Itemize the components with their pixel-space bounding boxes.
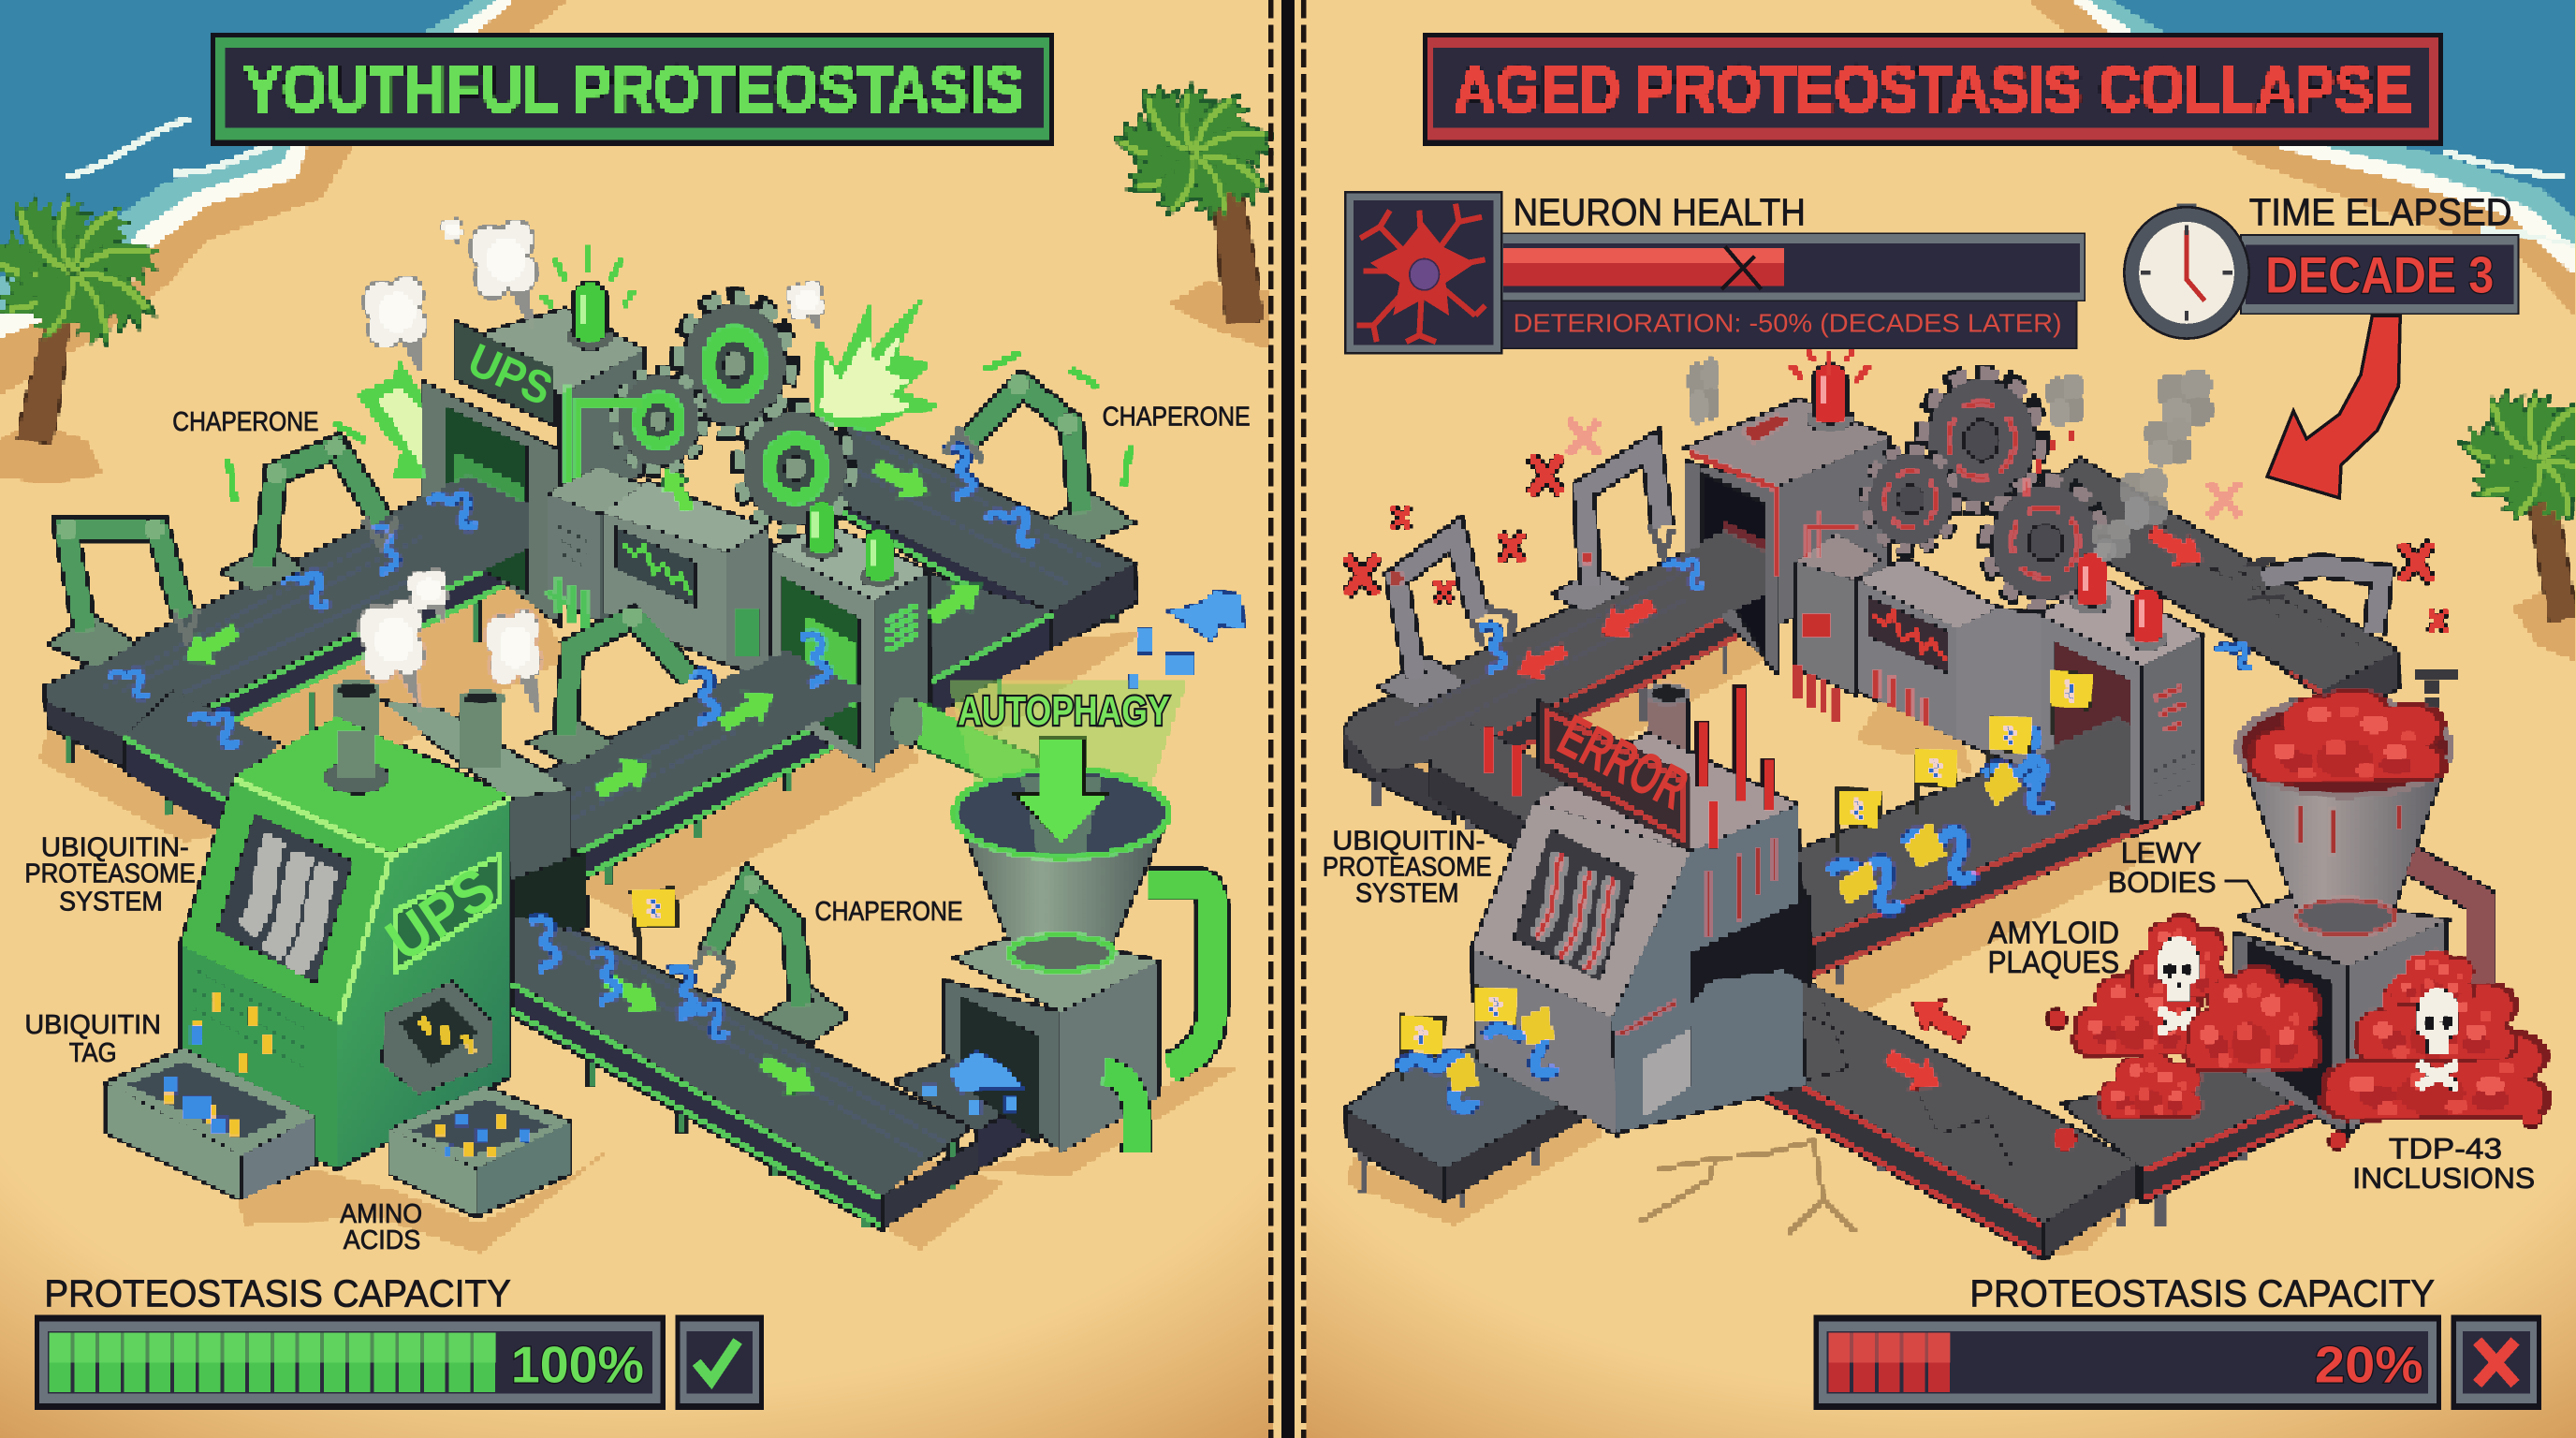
- shredder window: [217, 814, 353, 983]
- labels: left: [24, 403, 1251, 1255]
- green pipes to gears: [568, 387, 640, 493]
- labels: left: ACIDS: [344, 1225, 420, 1255]
- vents: [194, 970, 305, 1068]
- conveyor: lower right: [2063, 1040, 2315, 1225]
- blood streaks: [1618, 838, 1775, 1035]
- machine: cabinet aged: [1795, 513, 1881, 720]
- blue protein fragments: [1131, 592, 1244, 687]
- conveyor: right stub: [931, 575, 1051, 716]
- time elapsed panel: [2124, 190, 2519, 339]
- chimney: aged: [1647, 683, 1687, 770]
- labels: right: INCLUSIONS: [2352, 1161, 2535, 1195]
- time elapsed panel: DECADE 3: [2265, 246, 2494, 303]
- smoke: left: [359, 219, 824, 712]
- ocean: right: [2030, 0, 2576, 315]
- loose red inclusions: [2048, 1010, 2540, 1151]
- icon: x: [2452, 1314, 2541, 1410]
- pipe: to autophagy funnel: [890, 697, 1038, 796]
- capacity gauge: aged: PROTEOSTASIS CAPACITY: [1969, 1272, 2435, 1315]
- down arrow: [1014, 740, 1109, 844]
- gears: left: [614, 298, 852, 531]
- robot arm: upper right: [946, 374, 1134, 542]
- robot arm: lower: [694, 875, 848, 1042]
- aged factory art: [1344, 348, 2552, 1259]
- tagged proteins on belt: [1481, 561, 2250, 909]
- proteins on belts: left: [110, 448, 1033, 1036]
- arrow: time to decay: [2267, 315, 2400, 498]
- flag: tagged protein: [629, 884, 684, 959]
- machine: failing gate: [1686, 348, 1889, 674]
- conveyor: back left: [44, 500, 518, 814]
- panel: aged factory: [1323, 348, 2552, 1259]
- x marks: [1347, 420, 2446, 631]
- ground shadows: [1347, 624, 2152, 1257]
- labels: left: AMINO: [340, 1199, 422, 1229]
- bin: amino acids: [389, 1086, 570, 1216]
- bin: ubiquitin tag: [107, 991, 315, 1199]
- pile: small red: [2098, 1051, 2203, 1120]
- icon: clock: [2124, 204, 2249, 339]
- icon: green lamp: [542, 246, 634, 350]
- UPS sign plate: [455, 322, 553, 424]
- health bar: [1499, 233, 2085, 301]
- time elapsed panel: TIME ELAPSED: [2249, 190, 2512, 233]
- pipe: loop: [1150, 884, 1212, 1068]
- pile: lewy bodies: [2183, 964, 2322, 1072]
- conveyor: middle: [529, 641, 879, 884]
- machine: control cabinet: [547, 467, 649, 628]
- sand vignette right: [1306, 1051, 2576, 1438]
- title: youthful proteostasis: YOUTHFUL PROTEOSTASIS: [243, 51, 1023, 125]
- conveyor: back left stub: [1429, 723, 1586, 863]
- neuron health panel: NEURON HEALTH: [1513, 190, 1806, 233]
- ground cracks: [1641, 1140, 1855, 1233]
- labels: left: CHAPERONE: [172, 407, 318, 437]
- machine: exit gate: [723, 503, 929, 772]
- small energy marks: [228, 353, 1131, 501]
- icon: skull: [2159, 937, 2199, 1032]
- capacity gauge: aged: 20%: [2315, 1336, 2423, 1393]
- machine: autophagy funnel: [923, 740, 1212, 1153]
- labels: right: BODIES: [2108, 865, 2217, 899]
- labels: right: UBIQUITIN-: [1332, 827, 1486, 857]
- deterioration readout: DETERIORATION: -50% (DECADES LATER): [1513, 309, 2062, 338]
- conveyor: top right: [2021, 459, 2398, 731]
- labels: left: TAG: [69, 1038, 117, 1068]
- autophagy label: AUTOPHAGY: [958, 688, 1170, 734]
- belt arrows: left: [176, 450, 990, 1107]
- bar segments: [50, 1333, 496, 1392]
- pile: TDP-43 inclusions: [2319, 949, 2552, 1122]
- labels: right: LEWY: [2121, 836, 2202, 870]
- chimneys: [333, 681, 502, 781]
- youthful factory art: [39, 219, 1244, 1253]
- dark smoke: [1688, 359, 2213, 560]
- machine: monitor aged: [1858, 559, 2041, 772]
- blue debris in grinder: [923, 1051, 1022, 1114]
- labels: left: CHAPERONE: [1103, 403, 1251, 433]
- belt inside exit gate: [1996, 718, 2130, 853]
- pile: amyloid plaques: [2071, 914, 2226, 1057]
- palm tree: left: [0, 180, 170, 483]
- capacity gauge: youthful: 100%: [511, 1336, 644, 1393]
- bar segments: [1828, 1333, 1950, 1392]
- robot arm: aged upper: [1553, 447, 1673, 611]
- elbow pipe: [1104, 1072, 1137, 1151]
- labels: right: SYSTEM: [1355, 879, 1459, 909]
- flagged proteins at shredder exit: [1399, 986, 1554, 1108]
- machine: clogged funnel: [2234, 688, 2481, 1134]
- capacity gauge: youthful: [35, 1272, 764, 1410]
- robot arm: aged left: [1380, 535, 1515, 707]
- palm tree: right: [2457, 378, 2576, 661]
- panel: youthful factory: [24, 219, 1251, 1255]
- machine: monitor: [603, 481, 772, 677]
- error sign plate: [1538, 698, 1690, 851]
- labels: right: AMYLOID: [1988, 917, 2119, 951]
- ground shadows: [39, 575, 1236, 1253]
- conveyor: top right: [772, 422, 1137, 666]
- center divider: [1271, 0, 1304, 1438]
- title: aged proteostasis collapse: AGED PROTEOSTASIS COLLAPSE: [1454, 51, 2411, 125]
- belt inside gate: [419, 475, 527, 598]
- machine: error shredder: [1472, 733, 1808, 1134]
- exit arch: [1690, 897, 1808, 1005]
- labels: left: SYSTEM: [59, 888, 163, 917]
- red warning marks: [1484, 687, 1773, 850]
- robot arm: middle: [529, 607, 690, 766]
- burst: right of gears: [813, 296, 942, 431]
- labels: right: PROTEASOME: [1323, 853, 1492, 883]
- machine: UPS gate: [419, 246, 644, 624]
- machine: back box behind shredder: [378, 698, 587, 970]
- ocean: left: [0, 0, 567, 394]
- palm tree: center-left: [1111, 71, 1281, 348]
- machine: UPS shredder: [181, 681, 509, 1168]
- conveyor: lower cracked: [1708, 966, 2137, 1259]
- debris: [2415, 670, 2456, 707]
- ERROR text on sign: ERROR: [1548, 703, 1698, 822]
- labels: left: CHAPERONE: [815, 897, 962, 927]
- shredder window aged: [1513, 829, 1636, 981]
- machine: exit gate aged: [1996, 553, 2202, 853]
- labels: right: [1323, 827, 2535, 1195]
- sand vignette left: [0, 1051, 1273, 1438]
- neuron health panel: [1345, 190, 2085, 353]
- title: aged proteostasis collapse: [1423, 35, 2441, 144]
- labels: right: PLAQUES: [1988, 946, 2119, 980]
- neuron icon: [1345, 192, 1501, 353]
- capacity gauge: youthful: PROTEOSTASIS CAPACITY: [44, 1272, 511, 1315]
- conveyor: grinder feed: [896, 1049, 1038, 1170]
- gears: right: [1865, 373, 2104, 605]
- title: youthful proteostasis: [212, 35, 1055, 144]
- UPS sign plate on shredder: [394, 855, 501, 973]
- labels: left: UBIQUITIN-: [41, 833, 189, 863]
- robot arm: upper left: [222, 437, 398, 592]
- beach art: [0, 0, 2576, 661]
- belt arrows: right: [1510, 517, 2212, 1102]
- belt inside exit gate: [723, 651, 859, 761]
- capacity gauge: aged: [1814, 1272, 2541, 1410]
- labels: left: PROTEASOME: [24, 859, 196, 889]
- conveyor: middle with flagged proteins: [1797, 718, 2202, 986]
- autophagy glow: [949, 682, 1186, 809]
- labels: right: TDP-43: [2389, 1132, 2502, 1166]
- conveyor: lower: [513, 916, 977, 1229]
- icon: check: [675, 1314, 764, 1410]
- labels: left: UBIQUITIN: [24, 1010, 161, 1040]
- UPS text on shredder: UPS: [374, 856, 506, 974]
- burst: left of gate: [359, 361, 424, 477]
- conveyor: back left: [1344, 552, 1766, 829]
- belt inside gate: [1686, 531, 1766, 635]
- conveyor: bottom left: [1345, 1012, 1587, 1208]
- robot arm: aged broken right: [2244, 559, 2382, 633]
- deterioration readout: [1501, 301, 2076, 348]
- conveyor: back left stub: [124, 690, 279, 838]
- panel plate: [1643, 1027, 1692, 1118]
- UPS text on gate sign: UPS: [461, 334, 560, 416]
- output hopper: [381, 981, 493, 1094]
- sparks: [2024, 431, 2075, 494]
- robot arm: left: [50, 520, 198, 668]
